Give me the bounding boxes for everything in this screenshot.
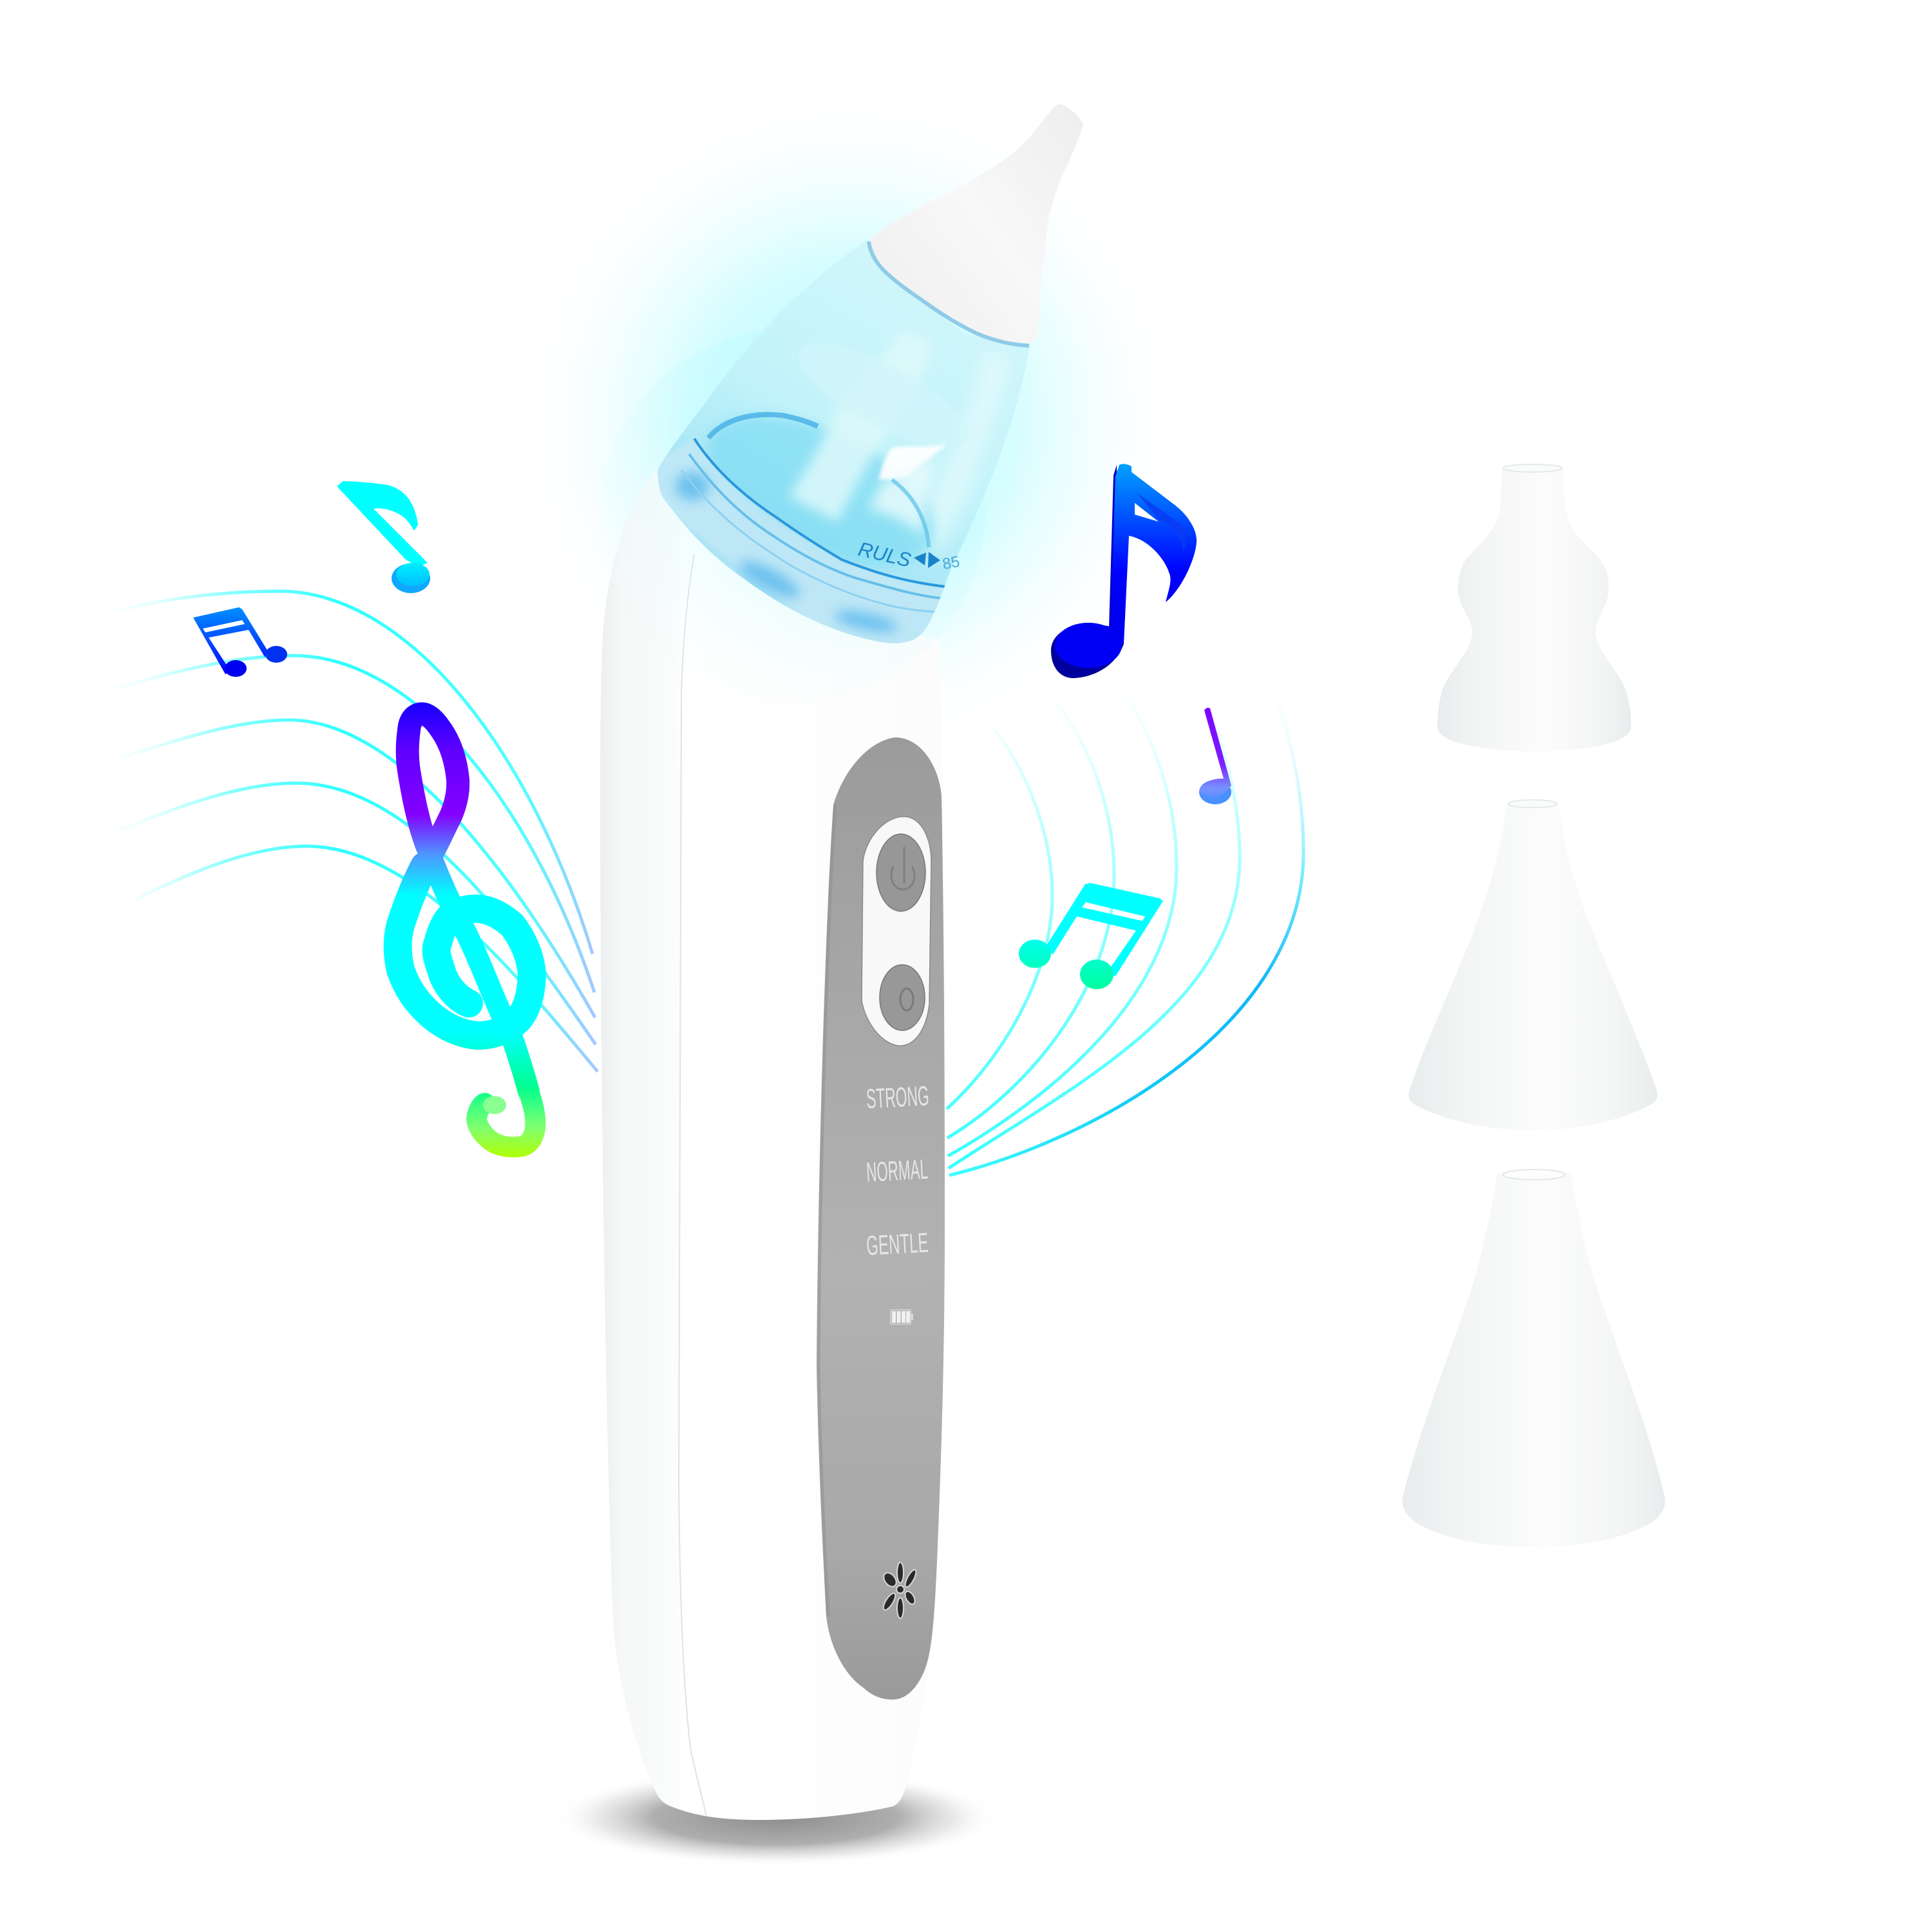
white refraction highlight [879, 444, 947, 480]
green double note [1019, 883, 1163, 989]
body glow tint [599, 328, 985, 702]
clef upper loop [408, 714, 458, 866]
purple note [1199, 708, 1231, 804]
icon: battery [891, 1310, 913, 1324]
base rim [650, 438, 953, 650]
ground shadow [554, 1768, 998, 1866]
mode button [880, 965, 925, 1030]
control panel [817, 737, 945, 1700]
nozzle 2 opening [1508, 800, 1557, 808]
nozzle attachment 1 [1437, 464, 1631, 752]
body seam line [678, 554, 706, 1816]
label: strong: STRONG [866, 1081, 930, 1115]
lower disc [703, 411, 940, 569]
nozzle 1 opening [1503, 464, 1562, 472]
transparent chamber [650, 240, 1029, 650]
treble clef [398, 714, 535, 1147]
scale number: 85 [941, 553, 961, 573]
clef tail curl [477, 1092, 535, 1147]
soft nozzle tip [868, 104, 1083, 346]
big blue note [1051, 464, 1197, 678]
scale text RULS: RULS [856, 538, 913, 571]
clef bowl [398, 866, 532, 1036]
panel left edge shading [819, 805, 835, 1616]
lower disc dark arc [708, 415, 818, 438]
arrow marker [914, 552, 940, 568]
upper disc [801, 346, 947, 444]
light highlight right side [923, 353, 1009, 555]
clef stem [428, 848, 529, 1092]
power button [876, 834, 925, 911]
device body [600, 466, 945, 1820]
internal stem [789, 328, 934, 522]
clef curl head [483, 1096, 506, 1114]
blue double note [193, 607, 287, 677]
label: gentle: GENTLE [866, 1227, 929, 1262]
nozzle attachment 3 [1402, 1170, 1665, 1547]
nozzle attachment 2 [1408, 800, 1658, 1130]
left sound waves [77, 591, 598, 1072]
glow behind chamber [522, 97, 1179, 753]
rim rings [694, 439, 952, 587]
right sound waves [947, 630, 1303, 1175]
nozzle collar [869, 242, 1029, 346]
label: normal: NORMAL [866, 1154, 929, 1188]
button housing [862, 817, 931, 1046]
nozzle 3 opening [1503, 1170, 1565, 1180]
rim blue patches [676, 472, 900, 636]
small cyan note [337, 481, 430, 593]
icon: speaker holes [881, 1562, 918, 1618]
